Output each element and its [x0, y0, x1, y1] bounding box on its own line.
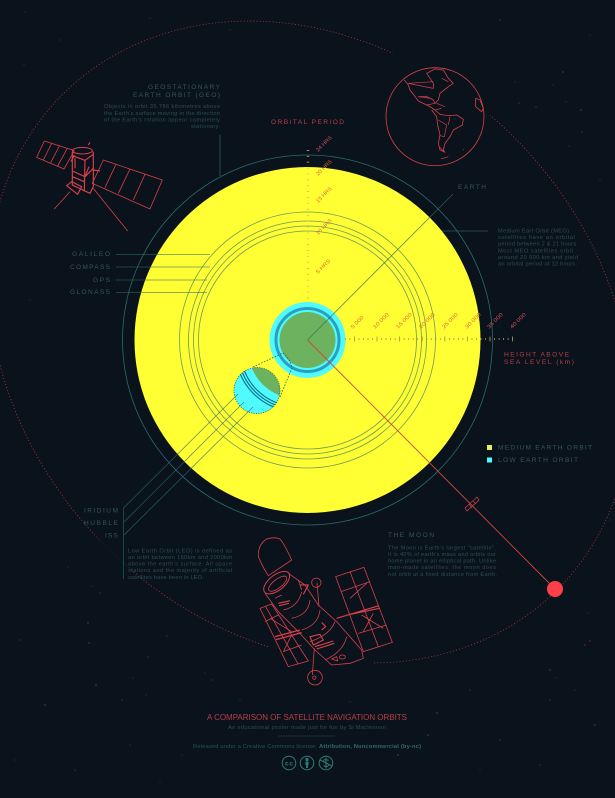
- heading: height above sea level: [504, 352, 574, 366]
- icon: globe: [386, 68, 484, 166]
- magnifier connector lines: [253, 353, 292, 397]
- moon pointer line: [308, 340, 555, 589]
- orbital period labels: 24 HRS: [315, 135, 334, 153]
- meo system labels: GPS: [93, 277, 111, 284]
- icon: noncommercial: [319, 756, 333, 770]
- text: meo description: Most MEO satellites orbit: [498, 248, 573, 254]
- leo system labels: HUBBLE: [84, 520, 119, 527]
- leo system labels: ISS: [105, 532, 119, 540]
- text: geostationary description: of the Earth's rotation appear completely: [104, 118, 220, 124]
- height scale ticks: [345, 338, 514, 340]
- geo callout line: [219, 135, 221, 176]
- lower antenna: [308, 670, 322, 685]
- heading: orbital period: ORBITAL PERIOD: [271, 119, 344, 126]
- icons: creative commons: [282, 756, 333, 770]
- text: leo description: Low Earth Orbit (LEO) is defined as: [128, 548, 232, 554]
- right solar panel: [336, 567, 392, 652]
- height scale labels: 25 000: [441, 312, 460, 330]
- heading: height above sea level: HEIGHT ABOVE: [504, 352, 570, 358]
- medium earth orbit zone: [134, 167, 480, 513]
- text: leo description: satellites have been in LEO.: [128, 575, 204, 581]
- meo system leader lines: [116, 254, 210, 292]
- leo system leader lines: [124, 394, 253, 579]
- orbital period labels: 10 HRS: [315, 218, 334, 236]
- leo system labels: IRIDIUM: [84, 508, 118, 514]
- text: leo description: an orbit between 160km and 2000km: [128, 555, 232, 561]
- meo system labels: GALILEO: [72, 251, 110, 258]
- moon: [547, 581, 563, 597]
- text: leo description: stations and the majority of artificial: [128, 568, 232, 574]
- icon: hubble telescope: [258, 538, 392, 685]
- leo system labels: [84, 508, 119, 540]
- text: meo description: period between 2 & 21 hours.: [498, 242, 578, 248]
- height scale labels: 35 000: [486, 312, 505, 330]
- text: meo description: Medium Eart Orbit (MEO): [498, 228, 569, 234]
- orbital period labels: 15 HRS: [315, 186, 334, 204]
- icon: cc: cc: [285, 760, 293, 768]
- text: moon description: home planet in an elliptical path. Unlike: [388, 558, 496, 564]
- heading: the moon: THE MOON: [388, 532, 434, 539]
- aperture inner ring: [266, 573, 289, 594]
- icon: navigation satellite: [37, 141, 162, 231]
- magnifier outline: [234, 368, 280, 414]
- magnified leo detail: [234, 352, 292, 414]
- legend: LOW EARTH ORBIT: [498, 457, 578, 464]
- height scale labels: [350, 312, 528, 330]
- text: leo description: above the earth's surface. All space: [128, 562, 232, 568]
- height scale labels: 5 000: [350, 315, 366, 330]
- earth disc: [280, 312, 336, 368]
- icon: attribution: [300, 756, 314, 770]
- height scale labels: 30 000: [464, 312, 483, 330]
- earth pointer line: [308, 194, 453, 340]
- meo system labels: GLONASS: [70, 289, 111, 296]
- text: meo description: [498, 228, 578, 268]
- label: earth: EARTH: [458, 184, 486, 191]
- license line: [193, 744, 421, 750]
- orbital period labels: 20 HRS: [315, 159, 334, 177]
- height scale labels: 15 000: [395, 312, 414, 330]
- text: geostationary description: stationary.: [191, 124, 220, 130]
- text: geostationary description: [104, 104, 220, 130]
- small satellite on moon line: [465, 497, 479, 511]
- text: moon description: not orbit at a fixed distance from Earth.: [388, 572, 497, 578]
- leo orbit band: [276, 308, 339, 372]
- text: moon description: It is 40% of earth's mass and orbits our: [388, 552, 496, 558]
- legend: MEDIUM EARTH ORBIT: [498, 444, 592, 452]
- heading: height above sea level: SEA LEVEL (km): [504, 359, 574, 366]
- height scale labels: 20 000: [418, 312, 437, 330]
- aperture door: [258, 538, 292, 576]
- geostationary orbit ring: [122, 155, 492, 525]
- tube segments: [275, 580, 347, 660]
- heading: geostationary: EARTH ORBIT (GEO): [133, 92, 220, 99]
- tube details: [278, 585, 334, 649]
- orbit gap beside leo labels: [60, 518, 152, 600]
- heading: geostationary: [133, 84, 221, 99]
- meo system labels: [70, 251, 111, 296]
- text: meo description: satellites have an orbital: [498, 235, 575, 241]
- text: leo description: [128, 548, 232, 581]
- orbital period labels: 5 HRS: [315, 258, 333, 275]
- text: moon description: The Moon is Earth's largest "satellite".: [388, 546, 496, 552]
- meo system labels: COMPASS: [70, 264, 111, 271]
- text: meo description: an orbital period of 12 hours.: [498, 262, 577, 268]
- heading: geostationary: GEOSTATIONARY: [148, 84, 221, 91]
- legend: [487, 444, 592, 464]
- text: moon description: man-made satellites, the moon does: [388, 565, 496, 571]
- meo satellite orbit rings: [180, 212, 436, 468]
- left solar panel: [260, 604, 308, 667]
- aperture ring: [260, 567, 293, 598]
- license line: Attribution, Noncommercial (by-nc): [319, 744, 421, 750]
- magnified disc: [234, 368, 280, 414]
- low earth orbit zone: [270, 302, 346, 378]
- subtitle: An educational poster made just for fun by Si Maclennan: [228, 725, 386, 731]
- orbit gap behind globe: [393, 25, 522, 116]
- upper antenna: [312, 578, 321, 587]
- meo callout line: [442, 230, 488, 232]
- poster title: A COMPARISON OF SATELLITE NAVIGATION ORBITS: [207, 713, 407, 722]
- orbit gap behind hubble: [268, 640, 372, 680]
- license line: Released under a Creative Commons license:: [193, 744, 317, 750]
- height scale labels: 10 000: [372, 312, 391, 330]
- text: geostationary description: the Earth's surface moving in the direction: [104, 111, 220, 117]
- text: geostationary description: Objects in orbit 35,786 kilometres above: [104, 104, 220, 110]
- orbital period ticks: [307, 150, 309, 300]
- text: meo description: around 20 000 km and yield: [498, 255, 578, 261]
- orbital period labels: [315, 135, 334, 275]
- text: moon description: [388, 546, 497, 578]
- telescope tube: [265, 573, 363, 665]
- height scale labels: 40 000: [509, 312, 528, 330]
